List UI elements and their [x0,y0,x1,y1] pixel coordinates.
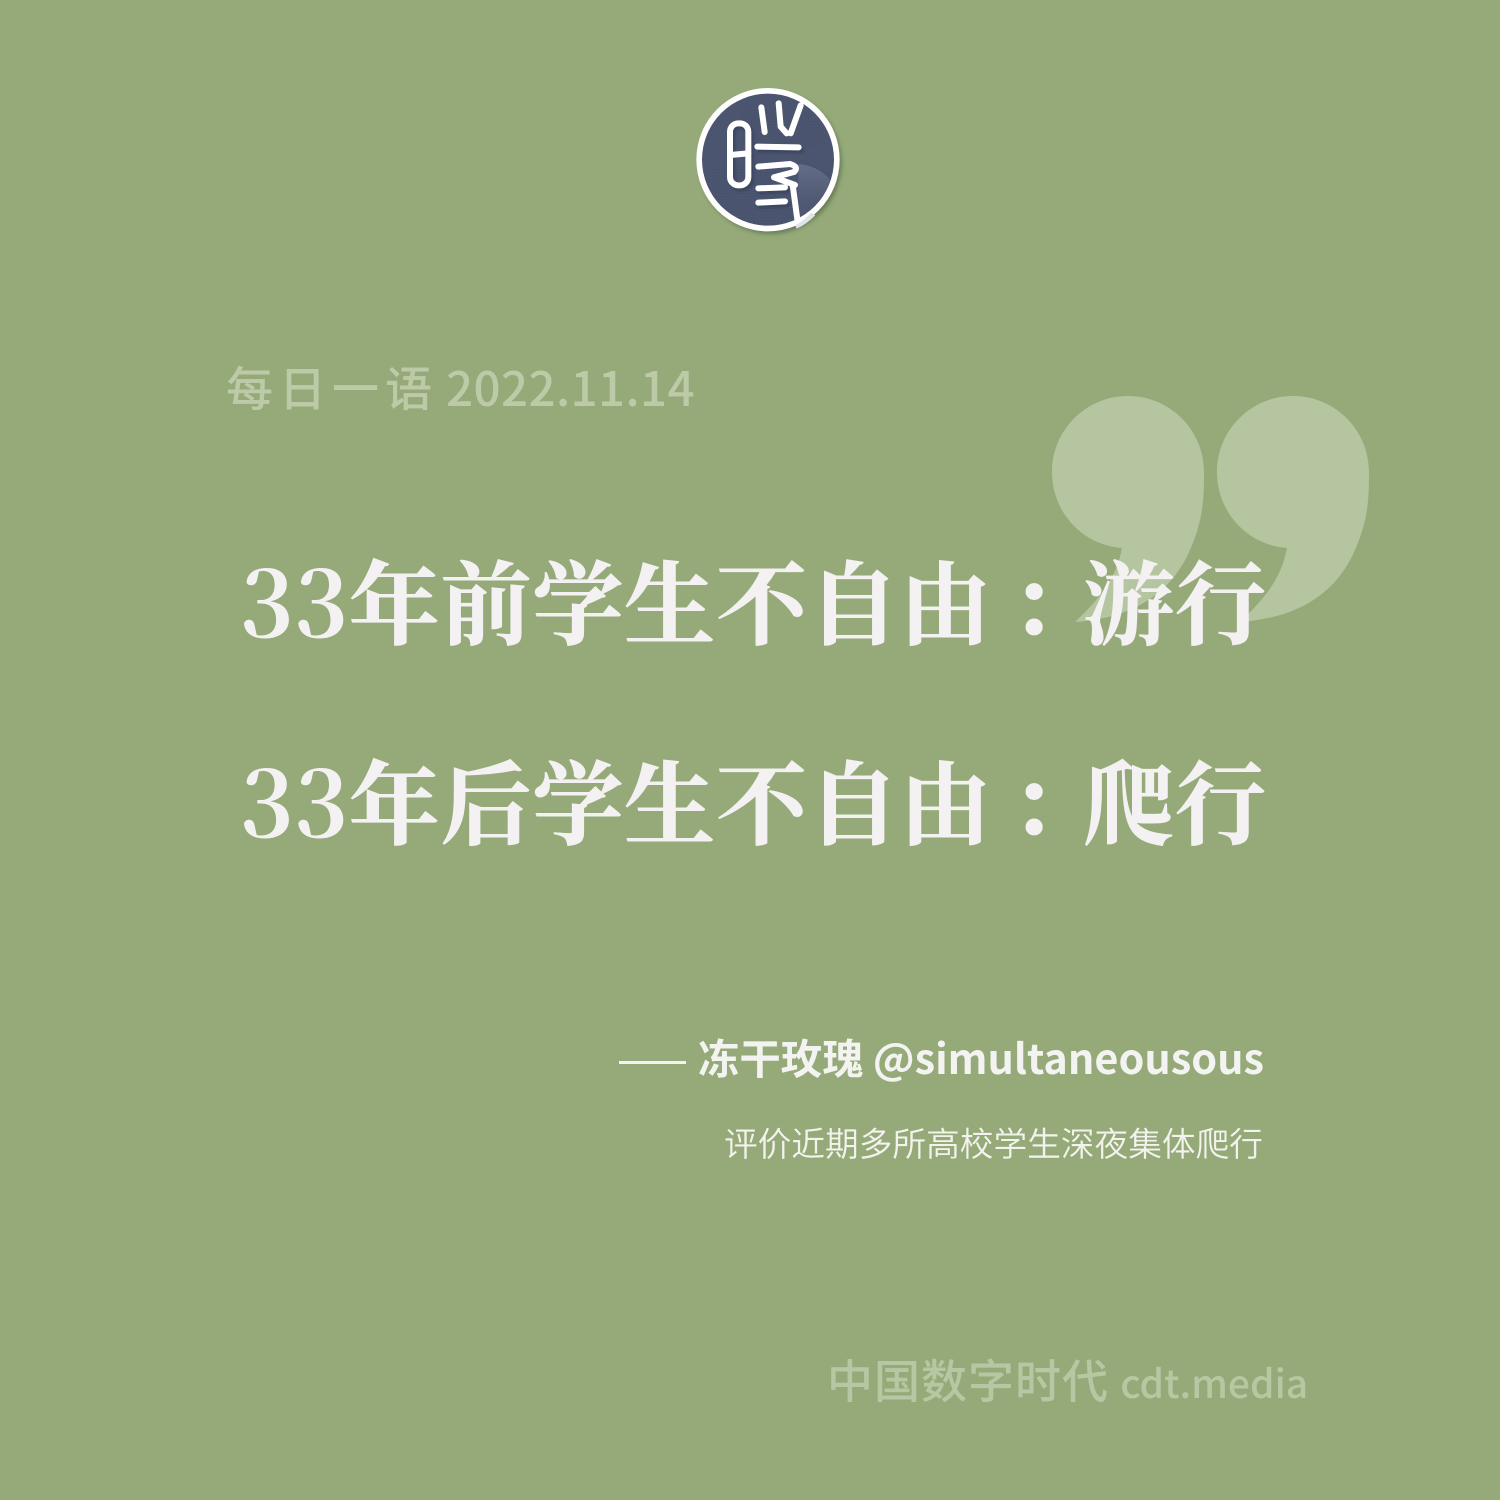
footer brand: 中国数字时代 cdt.media [827,1346,1308,1412]
context line: 评价近期多所高校学生深夜集体爬行 [724,1117,1263,1166]
icon: round logo seal [696,88,844,236]
quote line 1: 33年前学生不自由：游行 [240,533,1267,664]
quote line 2: 33年后学生不自由：爬行 [240,733,1267,864]
attribution: 冻干玫瑰 @simultaneousous [698,1026,1264,1086]
date heading: 每日一语 2022.11.14 [226,351,695,420]
